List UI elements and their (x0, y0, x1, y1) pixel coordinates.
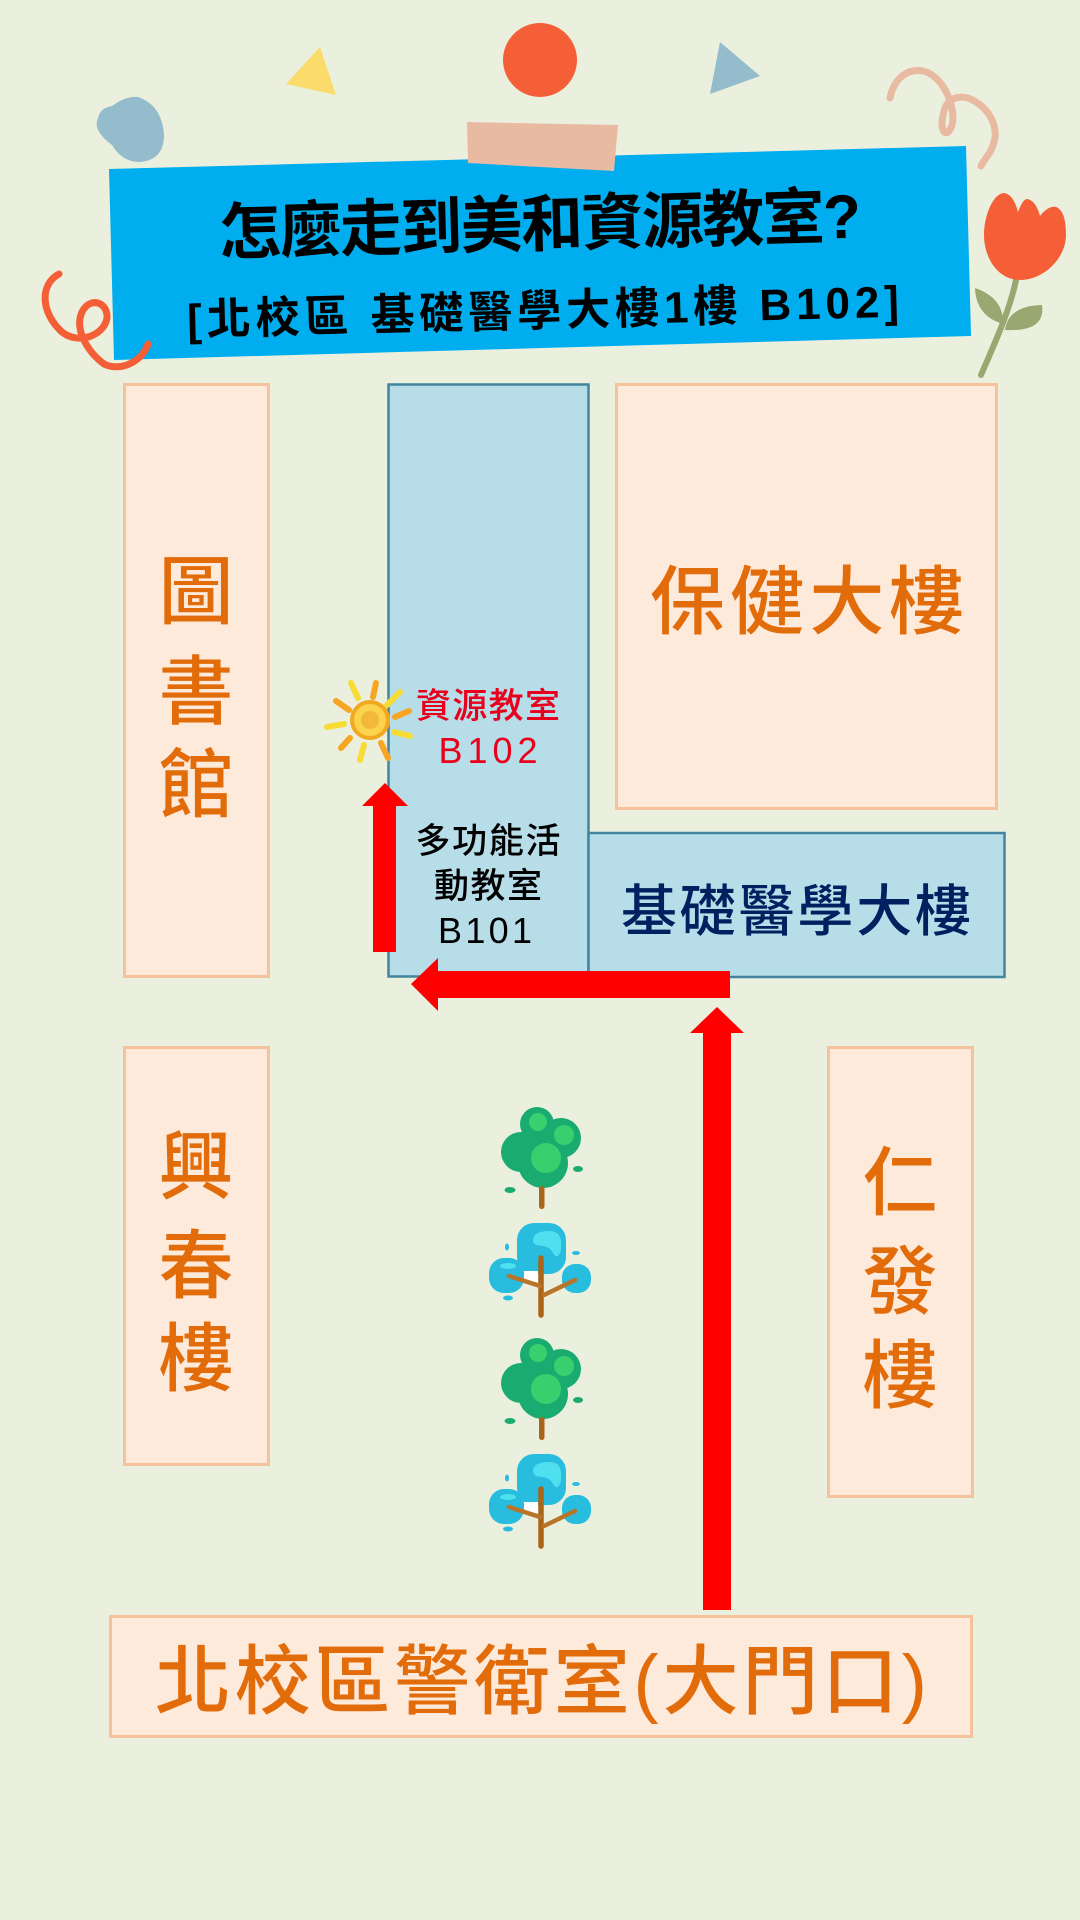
icon: red swirl (45, 274, 148, 367)
arrow: left along building (411, 958, 730, 1011)
label: resource classroom: B102 (438, 730, 538, 771)
panel: basic medicine building (588, 833, 1004, 977)
label: library: 書 (158, 650, 234, 734)
label: renfa building: 樓 (862, 1334, 938, 1418)
icon: green tree (501, 1107, 583, 1209)
icon: sun (327, 683, 410, 760)
label: library: 圖 (158, 550, 234, 634)
label: multipurpose classroom: 動教室 (434, 867, 542, 906)
icon: tulip flower (975, 193, 1066, 375)
label: gate: 北校區警衛室(大門口) (155, 1640, 927, 1725)
label: multipurpose classroom (416, 822, 560, 951)
label: xingchun building: 興 (158, 1125, 234, 1209)
label: multipurpose classroom: B101 (438, 910, 532, 951)
icon: blue triangle (710, 42, 760, 94)
icon: orange circle (503, 23, 577, 97)
label: renfa building: 仁 (862, 1141, 938, 1225)
label: renfa building: 發 (862, 1240, 938, 1324)
subtitle: [北校區 基礎醫學大樓1樓 B102] (187, 278, 900, 345)
title: 怎麼走到美和資源教室? (218, 183, 862, 268)
icon: pink swirl (890, 70, 995, 166)
panel: north campus gate (110, 1616, 972, 1736)
panel: xingchun building (124, 1048, 268, 1464)
arrow: up to resource classroom (362, 783, 408, 952)
title banner (109, 146, 971, 360)
label: basic medicine building: 基礎醫學大樓 (621, 880, 971, 943)
label: library: 館 (158, 743, 234, 827)
label: multipurpose classroom: 多功能活 (416, 822, 560, 861)
icon: blue tree lower (489, 1454, 591, 1546)
label: resource classroom: 資源教室 (416, 687, 560, 726)
panel: library (124, 384, 268, 976)
icon: yellow triangle (286, 47, 336, 95)
panel: classroom wing (388, 384, 588, 976)
icon: tape (467, 122, 618, 171)
label: resource classroom (416, 687, 560, 771)
icon: blue blob (97, 97, 164, 162)
arrow: up from gate (690, 1007, 744, 1610)
icon: blue tree (489, 1223, 591, 1315)
label: xingchun building: 樓 (158, 1317, 234, 1401)
label: xingchun building: 春 (158, 1224, 234, 1308)
icon: green tree lower (501, 1338, 583, 1440)
label: health building: 保健大樓 (650, 560, 964, 644)
panel: health building (616, 384, 996, 808)
panel: renfa building (828, 1048, 972, 1496)
